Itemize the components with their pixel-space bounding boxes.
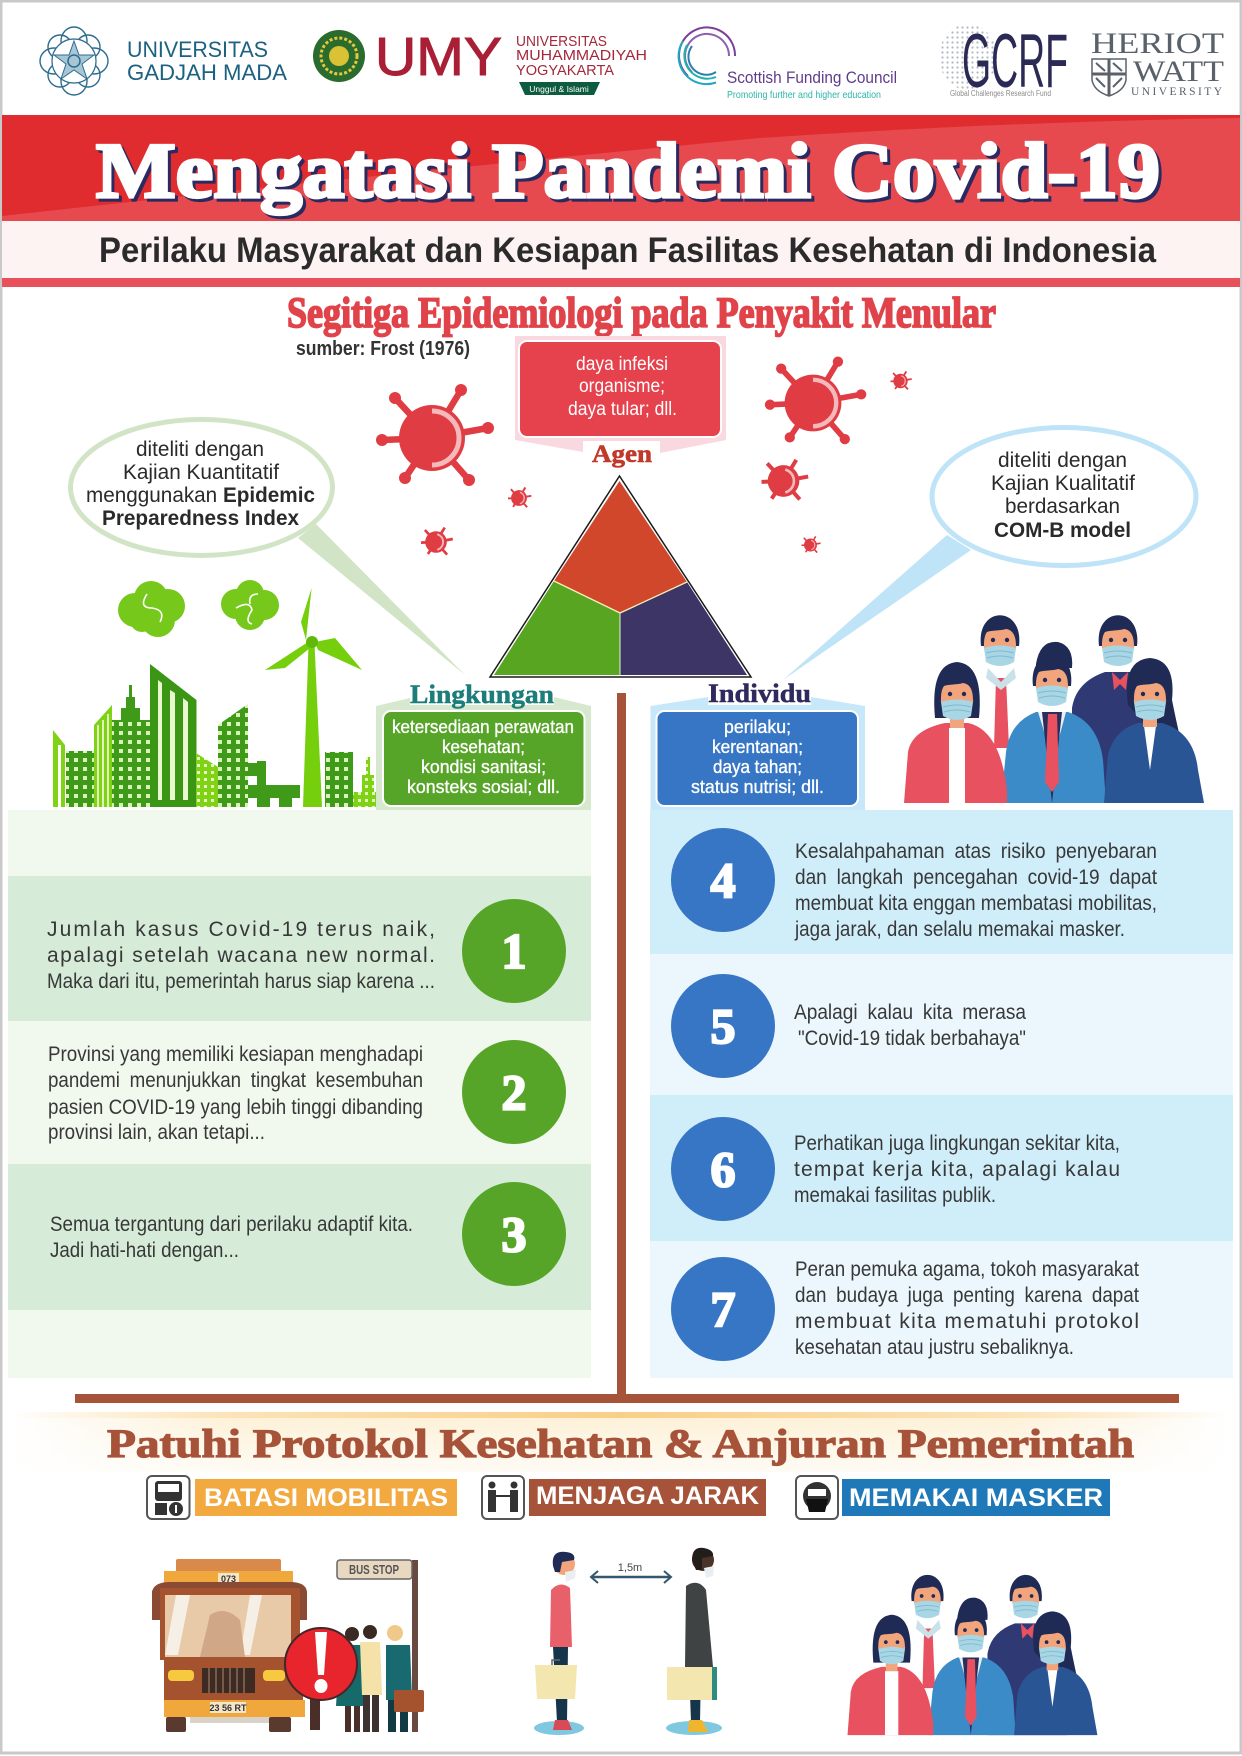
badge: batasi mobilitas: BATASI MOBILITAS — [204, 1484, 448, 1512]
panel: lingkungan — [376, 680, 591, 810]
logo: Scottish Funding Council: Scottish Funding Council — [727, 68, 897, 87]
panel: individu — [650, 679, 865, 810]
logo: Heriot Watt University: UNIVERSITY — [1131, 86, 1223, 98]
badge: menjaga jarak — [482, 1476, 766, 1519]
illustration: bus at bus stop — [156, 1559, 424, 1732]
step 4 — [671, 828, 1157, 941]
step 2: 2 — [502, 1064, 526, 1120]
badge: menjaga jarak: MENJAGA JARAK — [536, 1482, 759, 1510]
panel: individu: Individu — [708, 679, 811, 708]
illustration: two people keeping 1.5 m distance — [534, 1548, 722, 1735]
step 1: Maka dari itu, pemerintah harus siap karena ... — [47, 970, 435, 993]
logo: UMY — [313, 27, 647, 95]
subtitle band — [2, 221, 1240, 287]
step 3: 3 — [502, 1206, 526, 1262]
step 1 — [47, 899, 566, 1003]
panel: agen: Agen — [592, 441, 652, 468]
step 7 — [671, 1257, 1139, 1361]
panel: individu: status nutrisi; dll. — [691, 777, 824, 797]
callout: qualitative study: Kajian Kualitatif — [991, 472, 1135, 495]
logo: Universitas Gadjah Mada — [40, 27, 287, 95]
step 4: jaga jarak, dan selalu memakai masker. — [794, 918, 1125, 941]
panel: lingkungan: kesehatan; — [442, 737, 525, 757]
step 1: apalagi setelah wacana new normal. — [47, 944, 435, 967]
title banner: Mengatasi Pandemi Covid-19 — [96, 127, 1160, 214]
logo: UMY: Unggul & Islami — [529, 84, 589, 94]
subtitle band: Perilaku Masyarakat dan Kesiapan Fasilitas Kesehatan di Indonesia — [99, 231, 1156, 270]
step 7: 7 — [710, 1281, 736, 1337]
illustration: bus at bus stop: 23 56 RT — [209, 1703, 247, 1713]
logo: UMY: UMY — [375, 27, 502, 87]
badge: memakai masker: MEMAKAI MASKER — [849, 1484, 1103, 1512]
panel: individu: perilaku; — [724, 717, 791, 737]
logo: UMY: UNIVERSITAS — [516, 33, 607, 50]
logo: Universitas Gadjah Mada: UNIVERSITAS — [127, 37, 268, 62]
panel: lingkungan: ketersediaan perawatan — [392, 717, 574, 737]
logo: Scottish Funding Council: Promoting further and higher education — [727, 89, 881, 101]
panel: agen — [515, 336, 726, 468]
icon: small virus 1 — [508, 487, 531, 507]
step 1: Jumlah kasus Covid-19 terus naik, — [47, 918, 435, 941]
icon: large virus right — [765, 357, 866, 444]
illustration: bus at bus stop: BUS STOP — [349, 1563, 399, 1577]
step 5: "Covid-19 tidak berbahaya" — [798, 1027, 1026, 1050]
step 6: memakai fasilitas publik. — [794, 1184, 996, 1207]
illustration: masked people group small — [848, 1575, 1097, 1735]
illustration: two people keeping 1.5 m distance: 1,5m — [618, 1562, 642, 1574]
step 6: tempat kerja kita, apalagi kalau — [794, 1158, 1120, 1181]
heading: epidemiological triangle: Segitiga Epidemiologi pada Penyakit Menular — [287, 290, 996, 337]
step 2 — [48, 1040, 566, 1144]
callout: qualitative study: berdasarkan — [1005, 495, 1120, 518]
step 7: Peran pemuka agama, tokoh masyarakat — [795, 1258, 1139, 1281]
step 7: membuat kita mematuhi protokol — [795, 1310, 1139, 1333]
illustration: masked people group — [904, 615, 1204, 803]
step 6: Perhatikan juga lingkungan sekitar kita, — [794, 1132, 1120, 1155]
step 6: 6 — [710, 1141, 736, 1197]
panel: individu: daya tahan; — [713, 757, 802, 777]
logo: GCRF — [939, 19, 1068, 104]
step 3 — [50, 1182, 566, 1286]
icon: small virus 2 — [421, 528, 453, 555]
icon: small virus 3 — [890, 371, 912, 389]
logo: Universitas Gadjah Mada: GADJAH MADA — [127, 60, 287, 85]
step 7: kesehatan atau justru sebaliknya. — [795, 1336, 1074, 1359]
step 4: 4 — [710, 852, 736, 908]
step 5: Apalagi kalau kita merasa — [794, 1001, 1026, 1024]
badge: memakai masker — [796, 1476, 1110, 1519]
panel: right blue steps background — [650, 810, 1233, 1378]
panel: lingkungan: konsteks sosial; dll. — [407, 777, 560, 797]
callout: quantitative study: menggunakan Epidemic — [86, 484, 315, 507]
illustration: green city and wind turbine — [53, 588, 378, 807]
callout: quantitative study — [70, 420, 465, 675]
callout: qualitative study: COM-B model — [994, 519, 1131, 542]
step 3: Semua tergantung dari perilaku adaptif kita. — [50, 1213, 413, 1236]
panel: left green steps background — [8, 810, 591, 1378]
panel: agen: daya infeksi — [576, 354, 668, 375]
logo: GCRF: Global Challenges Research Fund — [950, 89, 1051, 98]
step 4: Kesalahpahaman atas risiko penyebaran — [795, 840, 1157, 863]
icon: medium virus — [762, 460, 808, 499]
callout: quantitative study: Kajian Kuantitatif — [123, 461, 279, 484]
badge: batasi mobilitas — [147, 1476, 457, 1519]
step 2: pandemi menunjukkan tingkat kesembuhan — [48, 1069, 423, 1092]
title banner — [2, 115, 1240, 221]
callout: quantitative study: Preparedness Index — [102, 507, 299, 530]
step 5 — [671, 974, 1026, 1078]
logo: Heriot Watt University: WATT — [1133, 55, 1224, 88]
logo: Heriot Watt University — [1091, 27, 1224, 98]
panel: agen: daya tular; dll. — [568, 399, 677, 420]
heading: health protocol call to action — [10, 1412, 1230, 1472]
panel: individu: kerentanan; — [712, 737, 803, 757]
logo: Scottish Funding Council — [679, 27, 897, 101]
panel: lingkungan: kondisi sanitasi; — [421, 757, 546, 777]
callout: qualitative study: diteliti dengan — [998, 449, 1127, 472]
chart: epidemiological triangle — [490, 476, 751, 677]
callout: qualitative study — [783, 428, 1196, 680]
heading: health protocol call to action: Patuhi Protokol Kesehatan & Anjuran Pemerintah — [107, 1421, 1134, 1466]
step 4: dan langkah pencegahan covid-19 dapat — [795, 866, 1157, 889]
infographic canvas: GCRF — [962, 19, 1068, 104]
logo: UMY: YOGYAKARTA — [516, 62, 614, 79]
panel: lingkungan: Lingkungan — [410, 680, 555, 709]
step 2: Provinsi yang memiliki kesiapan menghadapi — [48, 1043, 423, 1066]
icon: large virus left — [376, 384, 494, 486]
panel: agen: organisme; — [579, 376, 665, 397]
step 2: provinsi lain, akan tetapi... — [48, 1121, 265, 1144]
step 2: pasien COVID-19 yang lebih tinggi dibanding — [48, 1096, 423, 1119]
step 1: 1 — [502, 923, 526, 979]
icon: small virus 4 — [802, 536, 821, 553]
source note: sumber: Frost (1976) — [296, 338, 470, 360]
icon: green clouds — [118, 580, 279, 637]
logo: Heriot Watt University: HERIOT — [1091, 27, 1224, 60]
step 3: Jadi hati-hati dengan... — [50, 1239, 239, 1262]
illustration: bus at bus stop: 073 — [221, 1574, 236, 1584]
step 5: 5 — [710, 998, 736, 1054]
step 4: membuat kita enggan membatasi mobilitas, — [795, 892, 1157, 915]
logo: UMY: MUHAMMADIYAH — [516, 47, 647, 64]
step 7: dan budaya juga penting karena dapat — [795, 1284, 1139, 1307]
connector: brown trunk and bar — [75, 693, 1179, 1403]
callout: quantitative study: diteliti dengan — [136, 438, 264, 461]
step 6 — [671, 1117, 1120, 1221]
